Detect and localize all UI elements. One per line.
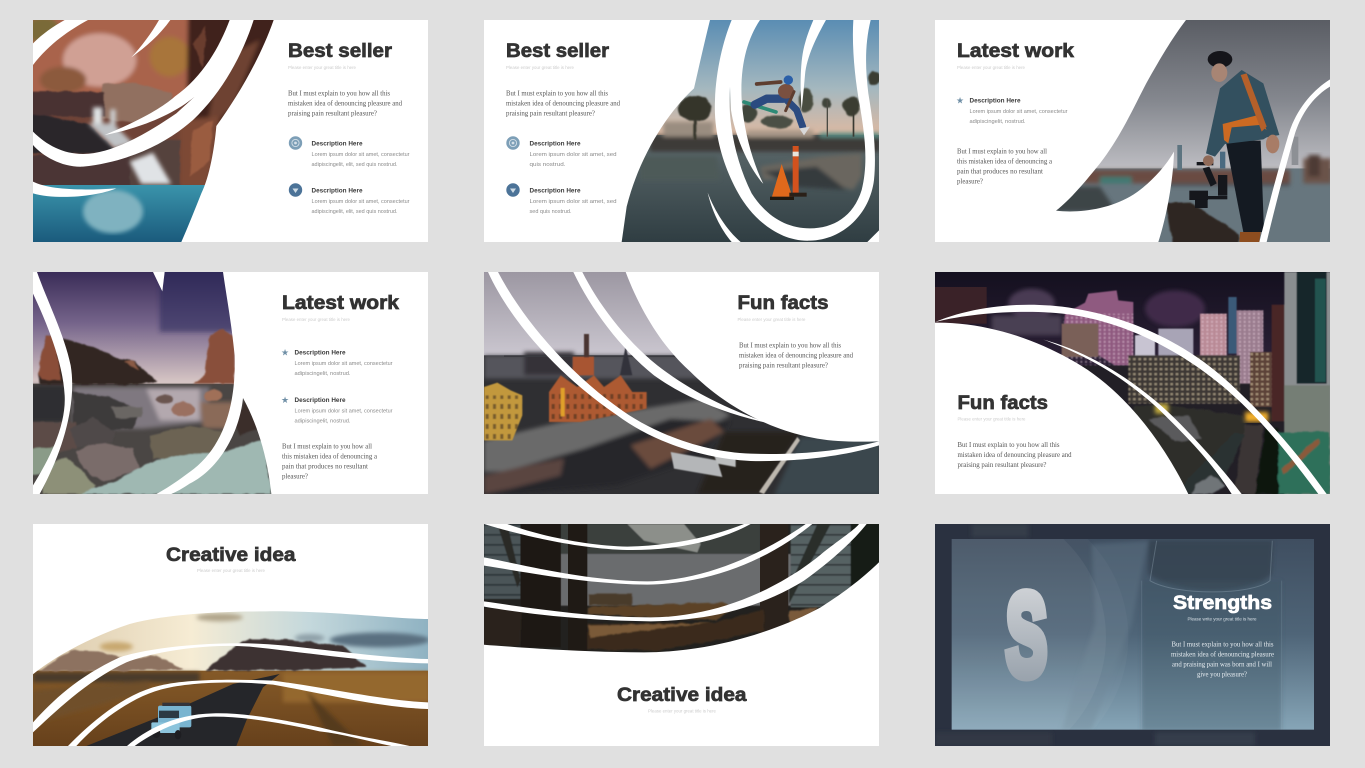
panel: creative idea landscape slide	[31, 522, 430, 747]
description one: Description Here	[312, 142, 363, 148]
skater	[744, 75, 810, 135]
subtitle: Please write your great title is here	[1188, 616, 1257, 622]
slide background	[33, 272, 428, 494]
body text: mistaken idea of denouncing pleasure and	[506, 100, 621, 108]
ribbon: middle	[68, 680, 428, 746]
description	[970, 98, 1068, 125]
description one: Description Here	[530, 142, 581, 148]
panel: fun facts harbour slide	[484, 272, 881, 495]
ribbon: bottom right corner	[867, 230, 879, 242]
icon: target	[289, 136, 302, 150]
ribbon: bottom	[127, 713, 410, 746]
icon: star: ★	[281, 395, 289, 405]
photo: boats and lake with white ribbons	[482, 524, 881, 747]
slide background	[33, 20, 428, 242]
description two	[294, 398, 393, 424]
street glow	[1155, 404, 1268, 422]
body text	[958, 442, 1072, 469]
description two: adipiscingelit, nostrud.	[294, 418, 350, 424]
ribbon: top	[33, 643, 428, 732]
title: Creative idea	[166, 544, 296, 566]
ribbon: inner arc	[1043, 340, 1242, 494]
gimbal camera	[1189, 162, 1227, 208]
white text area curve and ribbon	[156, 272, 276, 494]
slide background	[484, 524, 879, 746]
subtitle: Please enter your great title is here	[197, 568, 265, 573]
description two: Lorem ipsum dolor sit amet, consectetur	[294, 408, 393, 414]
body text: But I must explain to you how all this	[288, 90, 390, 98]
body text	[288, 90, 403, 118]
boats	[484, 594, 819, 651]
panel: creative idea boats slide	[482, 524, 881, 747]
description one	[294, 350, 393, 377]
body text: But I must explain to you how all this	[958, 442, 1060, 449]
overlapping circles	[837, 498, 1128, 768]
ribbon: outer arc	[935, 305, 1327, 494]
description two: Lorem ipsum dolor sit amet, sed	[530, 199, 616, 205]
body text: this mistaken idea of denouncing a	[282, 454, 377, 460]
city detail inside panel	[1062, 541, 1282, 731]
title: Best seller	[506, 40, 609, 62]
description one: Description Here	[294, 350, 346, 356]
description: adipiscingelit, nostrud.	[970, 119, 1026, 125]
photo: rocky coast with white ribbons	[33, 272, 272, 494]
description one: Lorem ipsum dolor sit amet, sed	[530, 152, 616, 158]
slide background	[33, 524, 428, 746]
subtitle: Please enter your great title is here	[958, 416, 1026, 422]
panel: best seller skater slide	[484, 20, 880, 243]
title: Best seller	[288, 40, 392, 62]
ribbon: bottom left	[33, 182, 116, 197]
headland and sea stack	[38, 329, 235, 385]
body text: give you pleasure?	[1197, 672, 1247, 678]
traffic cone and pole	[770, 146, 807, 200]
road	[86, 674, 280, 746]
slide background	[484, 272, 879, 494]
photo: waterfall with white ribbons	[33, 20, 274, 242]
description one: adipiscingelit, nostrud.	[294, 371, 350, 377]
body text: But I must explain to you how all this	[739, 342, 841, 350]
description one	[312, 142, 410, 168]
panel: best seller waterfall slide	[26, 13, 428, 245]
palm trees	[678, 72, 879, 140]
white top curve	[31, 522, 430, 676]
icon: star: ★	[281, 348, 289, 358]
subtitle: Please enter your great title is here	[957, 65, 1025, 70]
icon: diamond	[289, 183, 302, 197]
ribbon: middle	[484, 524, 812, 585]
body text: praising pain resultant pleasure?	[739, 362, 828, 370]
description: Lorem ipsum dolor sit amet, consectetur	[970, 109, 1068, 115]
panel: strengths slide	[837, 498, 1330, 768]
body text: praising pain resultant pleasure?	[958, 462, 1046, 469]
description two: Description Here	[294, 398, 346, 404]
ribbon: bottom	[708, 193, 741, 242]
panel: latest work coast slide	[26, 265, 428, 495]
panel: latest work photographer slide	[935, 20, 1332, 247]
photo: harbour town with white ribbons	[484, 272, 881, 495]
photo: night city with white ribbons	[935, 272, 1331, 495]
title: Fun facts	[958, 392, 1048, 414]
description two: Description Here	[312, 188, 363, 194]
wooden beams	[521, 524, 788, 651]
body text	[1171, 642, 1274, 678]
description one: adipiscingelit, elit, sed quis nostrud.	[312, 162, 398, 168]
foreground rocks	[26, 389, 271, 494]
title: Latest work	[282, 292, 399, 314]
bridge	[504, 355, 691, 357]
left building	[935, 287, 987, 324]
description one: Lorem ipsum dolor sit amet, consectetur	[312, 152, 410, 158]
skyline buildings	[1062, 272, 1331, 495]
ribbon: main sweeping band	[33, 20, 254, 167]
icon: star: ★	[956, 96, 964, 106]
body text: But I must explain to you how all this	[506, 90, 608, 98]
description two	[312, 188, 410, 215]
body text: But I must explain to you how all	[282, 444, 372, 450]
body text: pleasure?	[957, 178, 983, 186]
translucent gradient panel	[952, 539, 1314, 730]
title: Strengths	[1173, 592, 1272, 614]
subtitle: Please enter your great title is here	[738, 317, 806, 322]
body text: pleasure?	[282, 474, 308, 480]
photographer figure	[1203, 51, 1279, 242]
ribbon: top	[484, 524, 751, 550]
ribbon: right	[1259, 79, 1330, 242]
body text: mistaken idea of denouncing pleasure	[1171, 652, 1274, 658]
ribbon: left curve	[33, 272, 72, 494]
icon: diamond	[506, 183, 520, 197]
description two: Description Here	[530, 188, 581, 194]
description two	[530, 188, 616, 215]
subtitle: Please enter your great title is here	[506, 65, 574, 70]
body text: But I must explain to you how all	[957, 148, 1047, 156]
photo: skater with white ribbons	[622, 20, 879, 242]
description one: Lorem ipsum dolor sit amet, consectetur	[294, 361, 393, 367]
photo: road landscape with white ribbons	[31, 522, 430, 747]
icon: target	[506, 136, 520, 150]
title: Latest work	[957, 40, 1074, 62]
description two: adipiscingelit, elit, sed quis nostrud.	[312, 209, 398, 215]
ribbon: long sweeping band	[488, 272, 879, 461]
body text: this mistaken idea of denouncing a	[957, 158, 1052, 166]
white text area curve	[620, 20, 710, 242]
white text area curve	[1040, 20, 1186, 242]
ribbon: top tip	[153, 272, 165, 291]
brick buildings	[484, 334, 800, 494]
ribbon: centre sliver	[801, 20, 826, 110]
big letter S: S	[1006, 570, 1047, 700]
body text	[282, 444, 377, 480]
body text: pain that produces no resultant	[282, 464, 368, 470]
subtitle: Please enter your great title is here	[288, 65, 356, 70]
ribbon: top sliver	[131, 20, 170, 57]
ribbon: top left	[33, 20, 88, 65]
subtitle: Please enter your great title is here	[282, 317, 350, 322]
description one	[530, 142, 616, 168]
subtitle: Please enter your great title is here	[648, 708, 716, 714]
photo: photographer with white shapes	[1056, 20, 1330, 242]
description one: quis nostrud.	[530, 162, 566, 168]
dark aerial background	[837, 498, 1330, 768]
ribbon: lower	[484, 524, 867, 621]
slide background	[935, 20, 1330, 242]
body text: praising pain resultant pleasure?	[506, 110, 595, 118]
slide background	[484, 20, 879, 242]
body text: praising pain resultant pleasure?	[288, 110, 377, 118]
body text	[957, 148, 1052, 186]
title: Creative idea	[617, 684, 747, 706]
description two: Lorem ipsum dolor sit amet, consectetur	[312, 199, 410, 205]
description two: sed quis nostrud.	[530, 209, 572, 215]
white text area curve	[181, 20, 290, 242]
body text	[739, 342, 854, 370]
mountains	[40, 639, 366, 671]
body text: mistaken idea of denouncing pleasure and	[739, 352, 854, 360]
white bottom curve	[482, 561, 881, 747]
title: Fun facts	[738, 292, 829, 314]
panel: fun facts night city slide	[935, 272, 1331, 495]
car	[151, 703, 191, 739]
white text area curve	[626, 272, 879, 442]
body text: But I must explain to you how all this	[1172, 642, 1274, 648]
ribbon: inner sliver	[573, 272, 771, 424]
body text: pain that produces no resultant	[957, 168, 1043, 176]
white text area curve	[935, 323, 1188, 494]
body text	[506, 90, 621, 118]
mountain and lake	[484, 524, 881, 607]
body text: and praising pain was born and I will	[1172, 662, 1272, 668]
description: Description Here	[970, 98, 1021, 104]
ribbon: large oval	[715, 20, 875, 241]
body text: mistaken idea of denouncing pleasure and	[958, 452, 1072, 459]
slide background	[935, 272, 1330, 494]
body text: mistaken idea of denouncing pleasure and	[288, 100, 403, 108]
